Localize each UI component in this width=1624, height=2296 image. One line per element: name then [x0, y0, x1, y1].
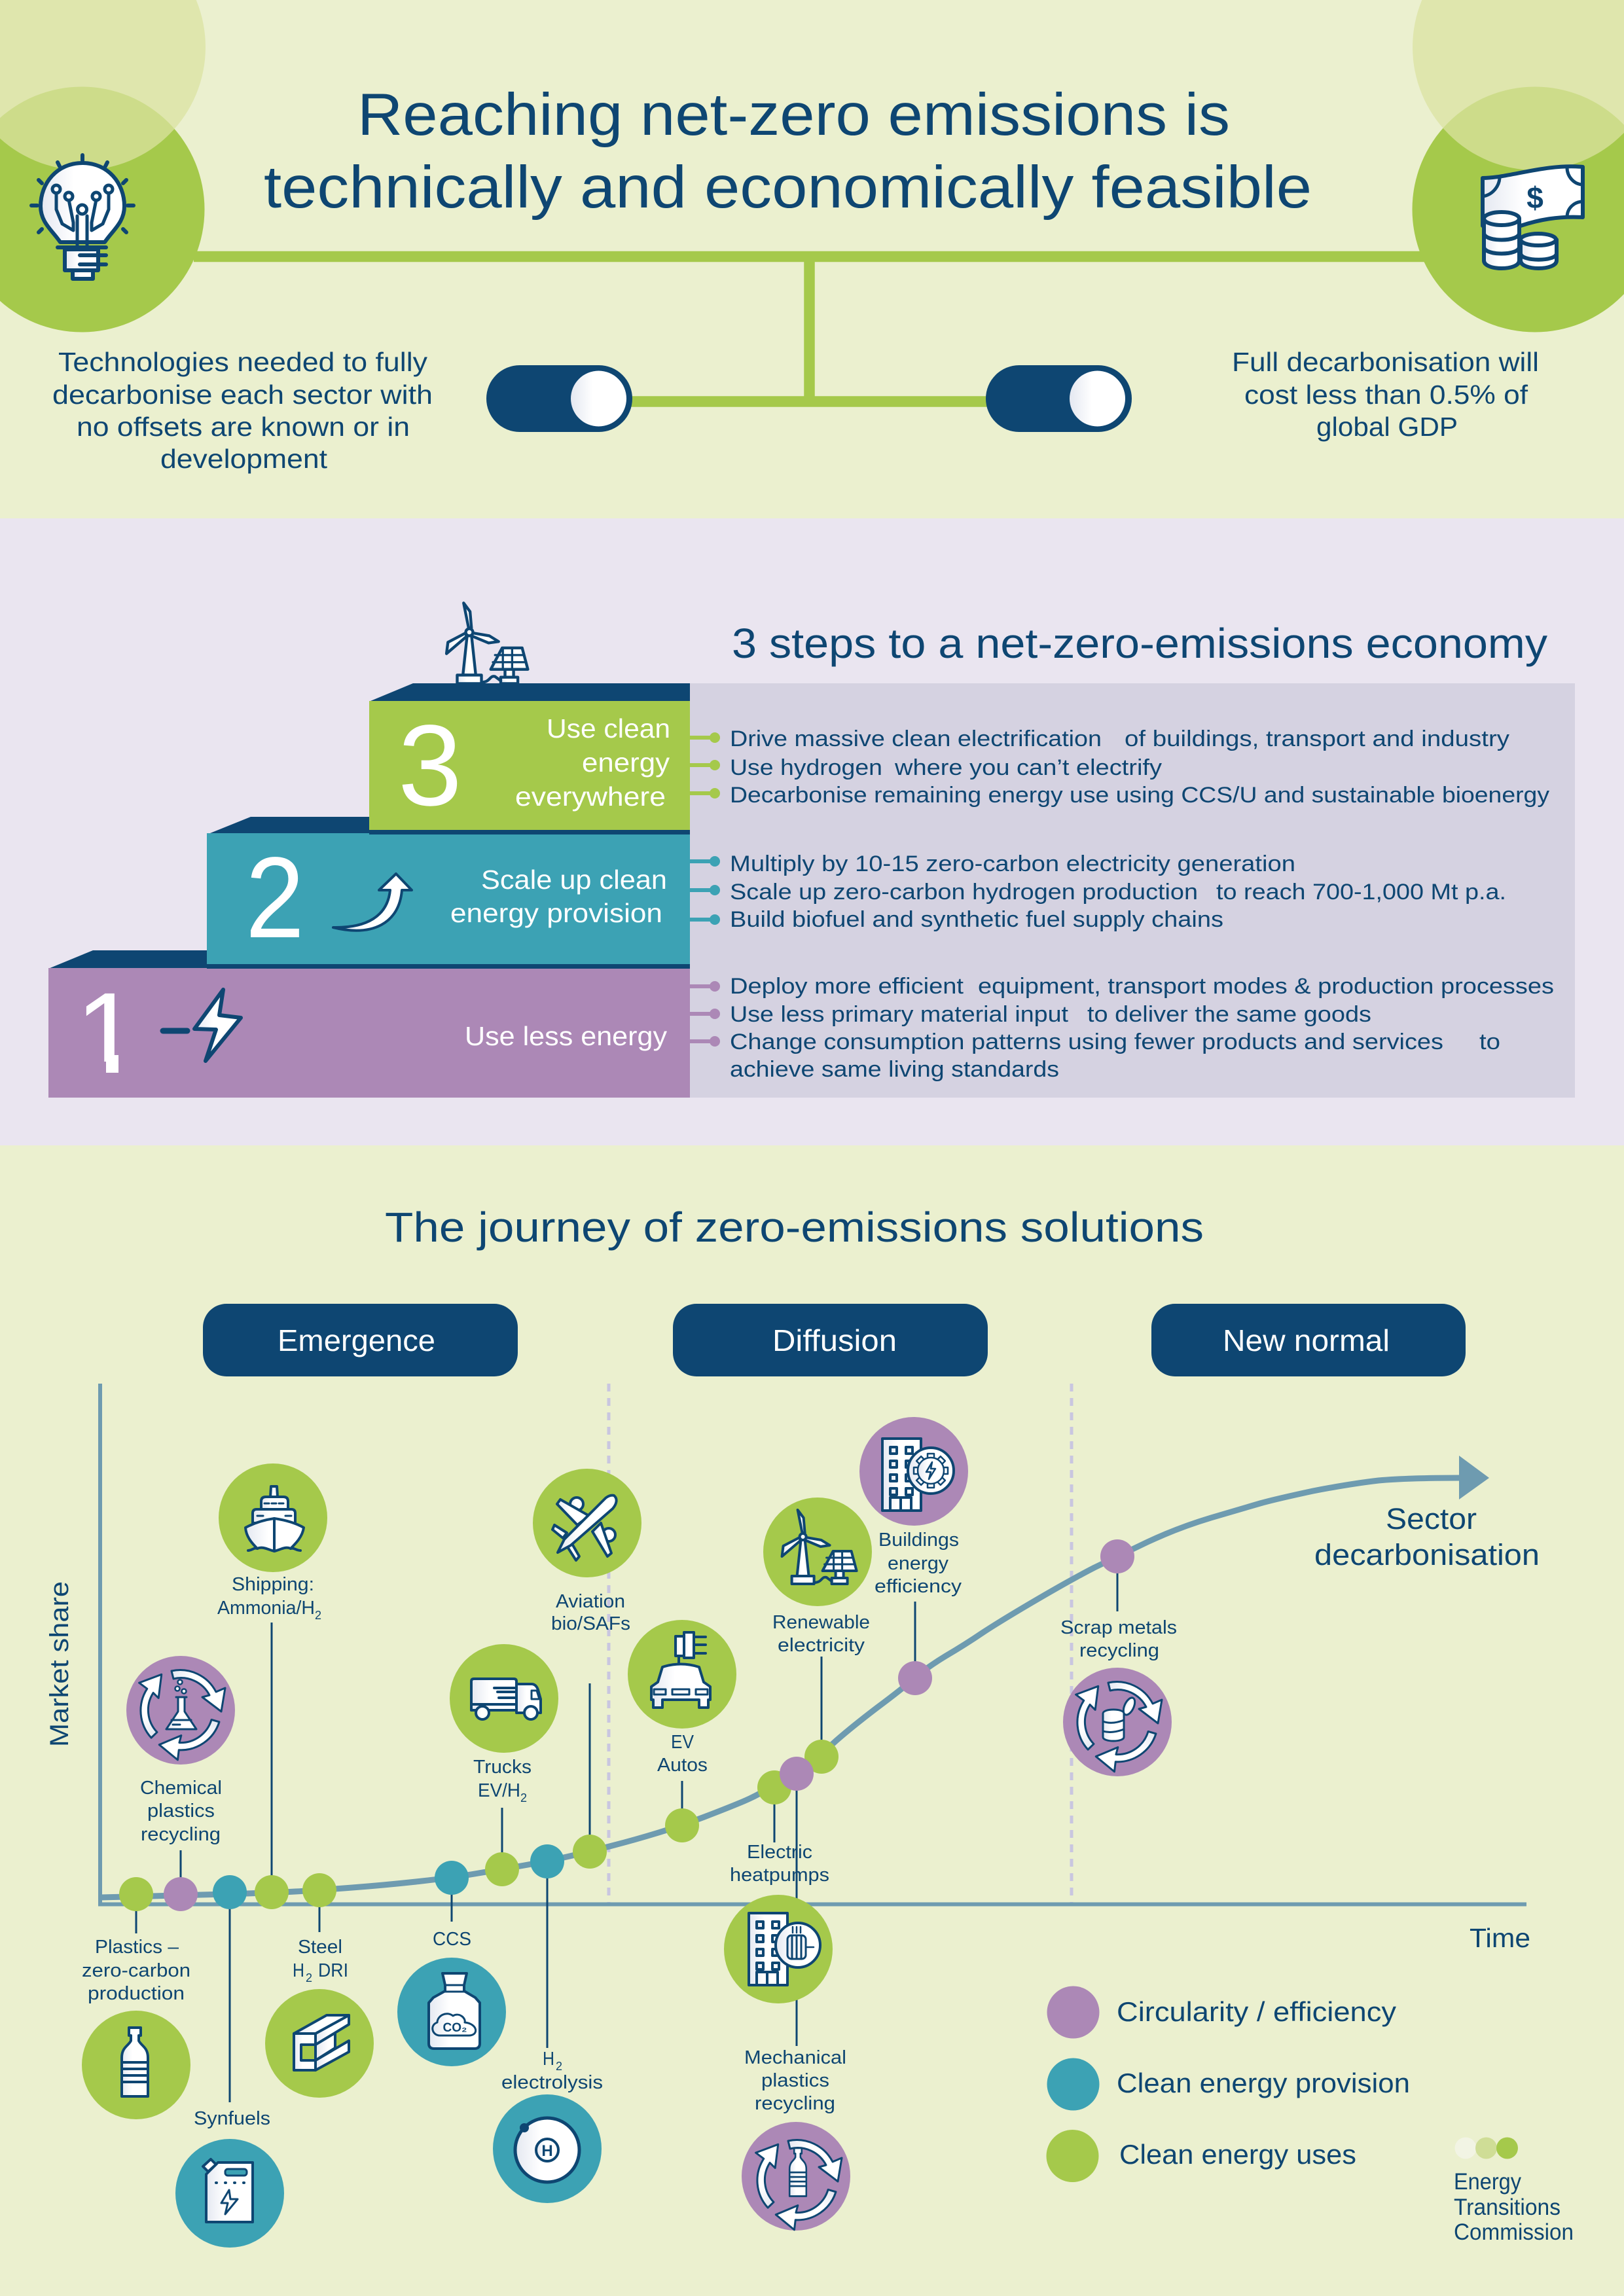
logo: Energy Transitions Commission: Commission — [1454, 2219, 1574, 2245]
step 3 block — [369, 683, 690, 834]
milestone: chemical plastics recycling: Chemical — [140, 1778, 222, 1799]
text: technologies claim: development — [160, 444, 328, 474]
legend — [1046, 1986, 1410, 2182]
milestone: renewable electricity: electricity — [778, 1635, 865, 1656]
text: cost claim: global GDP — [1316, 412, 1458, 442]
milestone: steel H2 DRI: DRI — [318, 1960, 348, 1981]
text: technologies claim: decarbonise each sector with — [52, 380, 433, 410]
heading: 3 steps: 3 steps to a net-zero-emissions economy — [732, 620, 1547, 667]
text: step 1 actions: Deploy more efficient — [730, 974, 964, 999]
milestone: steel H2 DRI: 2 — [306, 1971, 312, 1984]
text: technologies claim — [52, 347, 433, 474]
text: step 1 actions: to deliver the same goods — [1087, 1002, 1371, 1027]
text: step 3 actions — [730, 726, 1549, 808]
title: Reaching net-zero emissions is — [357, 82, 1230, 148]
toggle: right — [986, 365, 1132, 432]
milestone: buildings energy efficiency: Buildings — [878, 1530, 959, 1551]
step 2 block: Scale up clean — [481, 865, 667, 895]
step 3 block: everywhere — [515, 781, 666, 812]
milestone: chemical plastics recycling: recycling — [141, 1824, 221, 1845]
panel: 3 steps section — [0, 518, 1624, 1145]
milestone: electric heatpumps: Electric — [747, 1842, 812, 1863]
step 1 block: 1 — [75, 969, 139, 1098]
milestone: trucks — [450, 1644, 558, 1886]
text: step 3 actions: of buildings, transport and industry — [1125, 726, 1509, 751]
left decorative circles — [0, 0, 206, 332]
logo: Energy Transitions Commission: Energy — [1454, 2169, 1521, 2195]
milestone: plastics zero-carbon production — [82, 1877, 190, 2119]
text: step 2 actions: Scale up zero-carbon hydrogen production — [730, 880, 1198, 905]
text: step 3 actions: Use hydrogen — [730, 755, 882, 780]
text: technologies claim: no offsets are known or in — [77, 412, 410, 442]
text: sector decarbonisation: decarbonisation — [1314, 1538, 1540, 1571]
milestone: shipping: Shipping: — [232, 1574, 314, 1595]
milestone: buildings energy efficiency — [859, 1417, 968, 1695]
text: sector decarbonisation — [1314, 1502, 1540, 1571]
axis label: time: Time — [1470, 1923, 1530, 1953]
phase pill: Diffusion — [673, 1304, 988, 1376]
axis label: market share: Market share — [45, 1581, 74, 1747]
text: sector decarbonisation: Sector — [1386, 1502, 1477, 1535]
step 3 block: Use clean — [547, 713, 670, 744]
connectors: step 2 bullets — [690, 856, 720, 925]
milestone: H2 electrolysis: electrolysis — [501, 2072, 603, 2093]
milestone: plastics zero-carbon production: production — [88, 1983, 185, 2004]
icon: banknote and coins — [1483, 166, 1583, 268]
milestone: H2 electrolysis: 2 — [556, 2060, 562, 2073]
milestone: shipping: 2 — [315, 1609, 321, 1622]
step 1 block: Use less energy — [465, 1021, 668, 1051]
text: technologies claim: Technologies needed to fully — [58, 347, 428, 377]
milestone: buildings energy efficiency: efficiency — [875, 1576, 962, 1597]
text: cost claim: cost less than 0.5% of — [1244, 380, 1528, 410]
text: step 3 actions: Decarbonise remaining energy use using CCS/U and sustainable bioenergy — [730, 783, 1549, 808]
milestone: buildings energy efficiency: energy — [888, 1553, 949, 1574]
phase pill: New normal: New normal — [1223, 1323, 1390, 1357]
phase pill: Emergence — [203, 1304, 518, 1376]
phase pill: Emergence: Emergence — [278, 1323, 435, 1357]
chart axes — [100, 1384, 1526, 1905]
adoption curve with arrow — [100, 1456, 1489, 1897]
text: step 1 actions: equipment, transport modes & production processes — [978, 974, 1554, 999]
step 2 block: 2 — [245, 834, 304, 962]
milestone: electric heatpumps: heatpumps — [730, 1865, 829, 1886]
text: cost claim — [1232, 347, 1539, 442]
milestone: renewable electricity: Renewable — [772, 1612, 870, 1633]
step 3 block: energy — [582, 747, 670, 778]
text: step 3 actions: Drive massive clean electrification — [730, 726, 1102, 751]
milestone: EV autos: EV — [671, 1732, 695, 1753]
text: step 1 actions: achieve same living standards — [730, 1057, 1059, 1082]
milestone: CCS — [397, 1861, 506, 2066]
text: step 1 actions: Use less primary material input — [730, 1002, 1069, 1027]
milestone: trucks: 2 — [520, 1791, 527, 1804]
milestone: mechanical plastics recycling — [740, 1757, 850, 2239]
panel: journey section — [0, 1145, 1624, 2296]
panel: top feasibility section — [0, 0, 1624, 518]
text: step 2 actions — [730, 852, 1506, 932]
logo: Energy Transitions Commission — [1454, 2138, 1574, 2245]
step 1 block — [48, 950, 690, 1098]
heading: journey: The journey of zero-emissions solutions — [385, 1204, 1204, 1251]
milestone: steel H2 DRI — [265, 1873, 374, 2098]
milestone: EV autos: Autos — [657, 1755, 708, 1776]
title: technically and economically feasible — [264, 154, 1312, 221]
legend: Clean energy uses — [1119, 2139, 1356, 2170]
milestone: aviation: bio/SAFs — [551, 1613, 630, 1634]
milestone: H2 electrolysis: H — [543, 2049, 554, 2070]
icon: light bulb — [31, 155, 134, 279]
milestone: plastics zero-carbon production: Plastics – — [95, 1937, 179, 1958]
legend: Circularity / efficiency — [1117, 1996, 1396, 2027]
icon: banknote and coins: $ — [1526, 181, 1543, 215]
toggle: left — [486, 365, 632, 432]
milestone: aviation: Aviation — [556, 1591, 625, 1612]
connectors: step 1 bullets — [690, 981, 720, 1047]
milestone: CCS: CO₂ — [443, 2021, 467, 2035]
text: step 3 actions: where you can’t electrify — [894, 755, 1162, 780]
milestone: shipping: Ammonia/H — [217, 1598, 315, 1619]
connectors: step 3 bullets — [690, 732, 720, 798]
legend: Clean energy provision — [1117, 2068, 1410, 2098]
step 2 block: energy provision — [450, 898, 662, 928]
phase pill: Diffusion: Diffusion — [772, 1323, 897, 1357]
icon: wind turbine and solar panel on step 3 — [446, 603, 528, 683]
step 3 block: 3 — [398, 702, 462, 830]
milestone: electric heatpumps — [730, 1770, 829, 1886]
milestone: CCS: CCS — [433, 1929, 471, 1950]
milestone: steel H2 DRI: Steel — [298, 1937, 342, 1958]
text: step 1 actions — [730, 974, 1554, 1082]
step 2 block — [207, 817, 690, 964]
right decorative circles — [1413, 0, 1624, 332]
icon: heatpump building — [724, 1895, 833, 2003]
title — [264, 82, 1312, 221]
text: cost claim: Full decarbonisation will — [1232, 347, 1539, 377]
milestone: synfuels — [175, 1875, 284, 2248]
logo: Energy Transitions Commission: Transitions — [1454, 2195, 1561, 2220]
text: step 2 actions: Build biofuel and synthetic fuel supply chains — [730, 907, 1223, 932]
phase pill: New normal — [1151, 1304, 1466, 1376]
milestone: scrap metals recycling — [1060, 1539, 1177, 1781]
milestone: chemical plastics recycling — [124, 1656, 235, 1911]
milestone: synfuels: Synfuels — [194, 2108, 270, 2129]
milestone: mechanical plastics recycling: recycling — [755, 2093, 835, 2114]
milestone: aviation — [533, 1469, 641, 1869]
milestone: H2 electrolysis: H — [541, 2142, 553, 2160]
milestone: plastics zero-carbon production: zero-carbon — [82, 1960, 190, 1981]
milestone: renewable electricity — [763, 1498, 872, 1774]
milestone: trucks: EV/H — [478, 1780, 520, 1801]
milestone: shipping — [217, 1463, 327, 1909]
detail panel background — [690, 683, 1575, 1098]
text: step 1 actions: to — [1479, 1030, 1500, 1054]
text: step 2 actions: Multiply by 10-15 zero-carbon electricity generation — [730, 852, 1295, 876]
milestone: mechanical plastics recycling: plastics — [761, 2070, 829, 2091]
milestone: EV autos — [628, 1620, 736, 1842]
milestone: chemical plastics recycling: plastics — [147, 1801, 215, 1821]
milestone: steel H2 DRI: H — [293, 1960, 304, 1981]
milestone: scrap metals recycling: recycling — [1079, 1640, 1159, 1661]
milestone: H2 electrolysis — [493, 1844, 603, 2203]
text: step 2 actions: to reach 700-1,000 Mt p.a. — [1216, 880, 1506, 905]
milestone: scrap metals recycling: Scrap metals — [1060, 1617, 1177, 1638]
milestone: mechanical plastics recycling: Mechanical — [744, 2047, 846, 2068]
text: step 1 actions: Change consumption patterns using fewer products and services — [730, 1030, 1443, 1054]
connector lines — [194, 257, 1431, 402]
milestone: trucks: Trucks — [473, 1757, 532, 1778]
